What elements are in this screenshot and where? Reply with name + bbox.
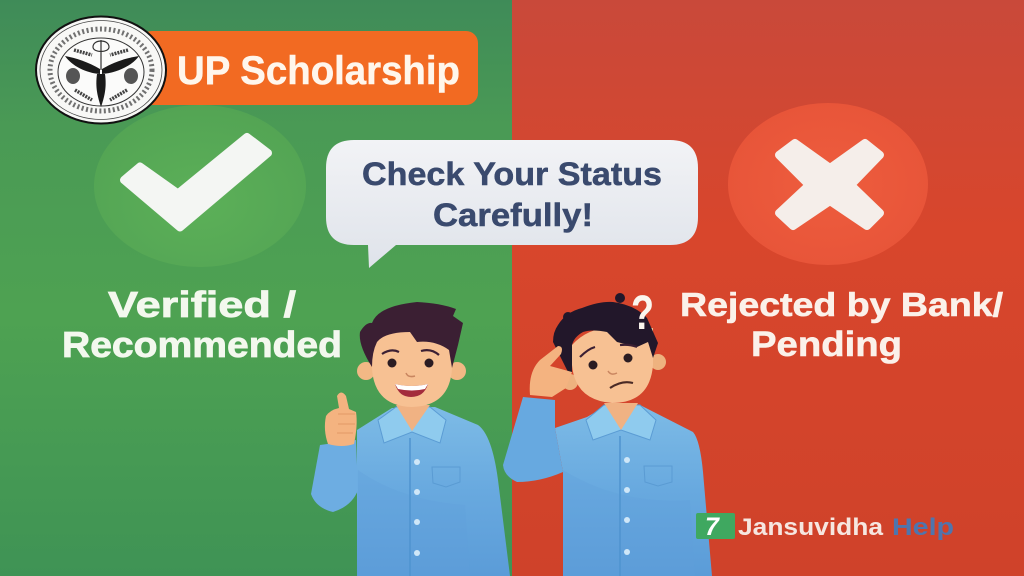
label: Verified / Recommended (62, 284, 342, 365)
watermark: Jansuvidha Help: 7 (705, 513, 720, 541)
ears (650, 354, 666, 370)
watermark: Jansuvidha Help: Jansuvidha (738, 514, 884, 541)
eyes, brows, nose, mouth (388, 358, 396, 368)
banner: UP Scholarship: UP Scholarship (177, 49, 460, 93)
watermark: Jansuvidha Help: Help (892, 514, 954, 541)
label: Rejected by Bank / Pending: Rejected by Bank/ (680, 286, 1003, 323)
shirt (555, 405, 712, 576)
speech bubble: Check Your Status Carefully (326, 140, 698, 268)
sleeve (503, 397, 563, 482)
icon: red cross circle (728, 103, 928, 265)
character: confused boy scratching head (503, 287, 712, 576)
icon: green check circle (94, 105, 306, 267)
watermark: Jansuvidha Help (696, 513, 954, 541)
character: smiling boy with thumbs up (311, 302, 510, 576)
question mark: ? (631, 287, 654, 340)
panel: green left background (0, 0, 512, 576)
hair (360, 302, 463, 368)
icon: state emblem logo (35, 16, 167, 124)
sleeve (311, 440, 358, 512)
label: Verified / Recommended: Verified / (108, 284, 296, 325)
label: Rejected by Bank / Pending (680, 286, 1003, 364)
speech bubble: Check Your Status Carefully: Check Your Status (362, 156, 662, 192)
panel: red right background (512, 0, 1024, 576)
collar (378, 407, 446, 443)
face (572, 328, 653, 403)
collar (586, 405, 656, 440)
hand with thumb (325, 392, 357, 446)
banner: UP Scholarship (140, 31, 478, 105)
eyes, brows, nose, mouth (588, 360, 598, 370)
ears (357, 362, 375, 380)
hand at head (530, 346, 572, 397)
hair (553, 302, 658, 372)
label: Rejected by Bank / Pending: Pending (751, 325, 902, 364)
face (372, 328, 452, 407)
shirt (357, 407, 510, 576)
speech bubble: Check Your Status Carefully: Carefully! (433, 197, 593, 233)
label: Verified / Recommended: Recommended (62, 324, 342, 365)
